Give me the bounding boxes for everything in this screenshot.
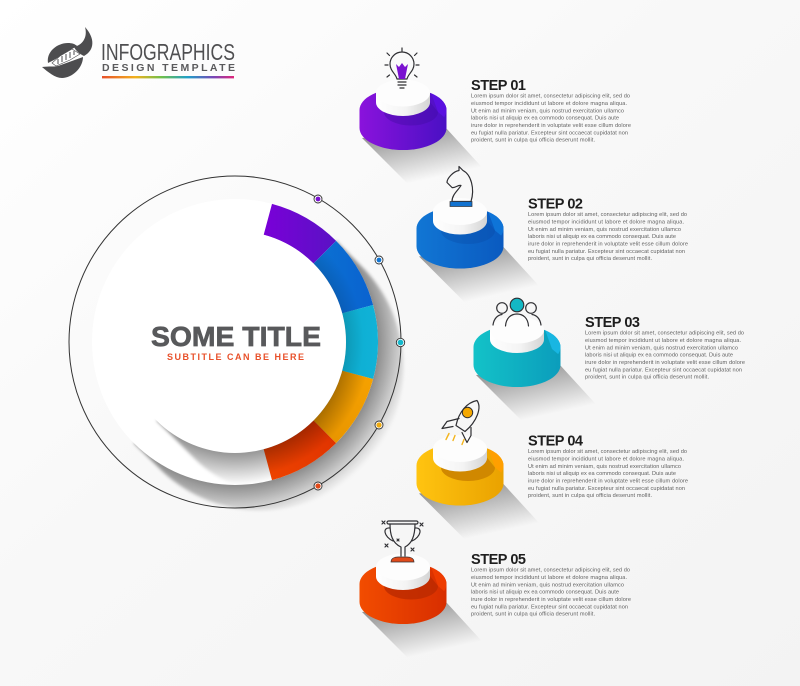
step 3 body text — [585, 331, 745, 381]
step 4 body text: eu fugiat nulla pariatur. Excepteur sint occaecat cupidatat non — [528, 486, 685, 492]
segment 3 cyan — [342, 305, 378, 379]
segment 5 red — [264, 420, 336, 480]
step 5 body text: laboris nisi ut aliquip ex ea commodo consequat. Duis aute — [471, 590, 619, 596]
step 4 body text: Ut enim ad minim veniam, quis nostrud exercitation ullamco — [528, 464, 681, 470]
segment 2 blue — [314, 241, 373, 313]
step 2 — [416, 166, 688, 298]
step 5 cylinder — [360, 566, 446, 624]
step 4 body text: eiusmod tempor incididunt ut labore et dolore magna aliqua. — [528, 456, 684, 462]
icon: trophy — [382, 521, 423, 562]
step 4 long shadow — [419, 484, 557, 552]
step 2 heading: STEP 02 — [528, 196, 583, 212]
connector dot blue — [375, 256, 383, 264]
step 4 cylinder — [416, 448, 504, 506]
step 3 cylinder — [474, 330, 560, 387]
step 1 body text: Lorem ipsum dolor sit amet, consectetur adipiscing elit, sed do — [471, 94, 630, 100]
logo wordmark: INFOGRAPHICS — [101, 39, 235, 65]
step 1 heading: STEP 01 — [471, 78, 526, 94]
step 1 body text: proident, sunt in culpa qui officia deserunt mollit. — [471, 138, 595, 144]
step 3 body text: irure dolor in reprehenderit in voluptate velit esse cillum dolore — [585, 360, 745, 366]
subtitle: SUBTITLE CAN BE HERE — [167, 352, 304, 362]
step 4 body text: proident, sunt in culpa qui officia deserunt mollit. — [528, 493, 652, 499]
step 5 body text: Ut enim ad minim veniam, quis nostrud exercitation ullamco — [471, 582, 624, 588]
step 5 body text: eu fugiat nulla pariatur. Excepteur sint occaecat cupidatat non — [471, 604, 628, 610]
step 3 heading: STEP 03 — [585, 315, 640, 331]
step 2 body text — [528, 212, 688, 262]
logo tagline: DESIGN TEMPLATE — [102, 62, 235, 74]
step 1 body text: eu fugiat nulla pariatur. Excepteur sint occaecat cupidatat non — [471, 130, 628, 136]
step 1 body text: eiusmod tempor incididunt ut labore et dolore magna aliqua. — [471, 101, 627, 107]
step 1 long shadow — [362, 128, 500, 196]
step 3 body text: Lorem ipsum dolor sit amet, consectetur adipiscing elit, sed do — [585, 331, 744, 337]
connector dot red — [314, 482, 322, 490]
step 1 body text — [471, 94, 631, 144]
step 4 body text — [528, 449, 688, 499]
step 4 body text: irure dolor in reprehenderit in voluptate velit esse cillum dolore — [528, 478, 688, 484]
icon: light bulb — [385, 48, 419, 88]
step 3 long shadow — [476, 365, 614, 433]
disc long shadow — [134, 241, 403, 510]
connector dot purple — [314, 195, 322, 203]
ring shading upper — [314, 241, 378, 379]
white disc — [92, 199, 378, 485]
step 3 body text: eu fugiat nulla pariatur. Excepteur sint occaecat cupidatat non — [585, 367, 742, 373]
step 5 body text: Lorem ipsum dolor sit amet, consectetur adipiscing elit, sed do — [471, 568, 630, 574]
step 2 body text: eiusmod tempor incididunt ut labore et dolore magna aliqua. — [528, 220, 684, 226]
step 2 body text: Lorem ipsum dolor sit amet, consectetur adipiscing elit, sed do — [528, 212, 687, 218]
connector dot cyan — [396, 338, 405, 347]
step 5 body text: irure dolor in reprehenderit in voluptate velit esse cillum dolore — [471, 597, 631, 603]
step 2 long shadow — [419, 246, 557, 314]
step 3 body text: eiusmod tempor incididunt ut labore et dolore magna aliqua. — [585, 338, 741, 344]
step 3 body text: laboris nisi ut aliquip ex ea commodo consequat. Duis aute — [585, 353, 733, 359]
outer ring line — [69, 176, 401, 508]
logo icon — [42, 27, 92, 78]
step 5 body text: eiusmod tempor incididunt ut labore et dolore magna aliqua. — [471, 575, 627, 581]
step 1 cylinder — [360, 92, 446, 150]
step 2 body text: laboris nisi ut aliquip ex ea commodo consequat. Duis aute — [528, 234, 676, 240]
segment 1 purple — [264, 204, 336, 264]
step 5 heading: STEP 05 — [471, 552, 526, 568]
step 2 body text: irure dolor in reprehenderit in voluptate velit esse cillum dolore — [528, 242, 688, 248]
title: SOME TITLE — [151, 321, 321, 352]
step 5 body text: proident, sunt in culpa qui officia deserunt mollit. — [471, 612, 595, 618]
logo rainbow bar — [102, 76, 234, 78]
step 2 body text: Ut enim ad minim veniam, quis nostrud exercitation ullamco — [528, 227, 681, 233]
step 3 body text: Ut enim ad minim veniam, quis nostrud exercitation ullamco — [585, 345, 738, 351]
logo — [42, 27, 235, 78]
step 3 — [474, 298, 745, 416]
step 3 body text: proident, sunt in culpa qui officia deserunt mollit. — [585, 375, 709, 381]
step 4 heading: STEP 04 — [528, 434, 583, 450]
step 1 body text: laboris nisi ut aliquip ex ea commodo consequat. Duis aute — [471, 116, 619, 122]
step 5 long shadow — [362, 602, 500, 670]
step 4 — [416, 400, 688, 535]
connector dot orange — [375, 421, 383, 429]
icon: rocket — [442, 400, 479, 444]
step 1 — [360, 47, 631, 180]
step 4 body text: laboris nisi ut aliquip ex ea commodo consequat. Duis aute — [528, 471, 676, 477]
step 2 cylinder — [416, 211, 504, 268]
step 4 body text: Lorem ipsum dolor sit amet, consectetur adipiscing elit, sed do — [528, 449, 687, 455]
segment 4 orange — [314, 371, 373, 443]
step 1 body text: irure dolor in reprehenderit in voluptate velit esse cillum dolore — [471, 123, 631, 129]
ring shading lower — [264, 371, 373, 480]
circular diagram — [69, 176, 405, 510]
icon: chess knight — [447, 166, 473, 206]
step 1 body text: Ut enim ad minim veniam, quis nostrud exercitation ullamco — [471, 108, 624, 114]
step 5 body text — [471, 568, 631, 618]
step 5 — [360, 520, 631, 654]
inner disc shadow — [155, 264, 363, 482]
icon: people — [493, 298, 541, 326]
step 2 body text: eu fugiat nulla pariatur. Excepteur sint occaecat cupidatat non — [528, 249, 685, 255]
step 2 body text: proident, sunt in culpa qui officia deserunt mollit. — [528, 256, 652, 262]
inner white disc — [124, 231, 346, 453]
